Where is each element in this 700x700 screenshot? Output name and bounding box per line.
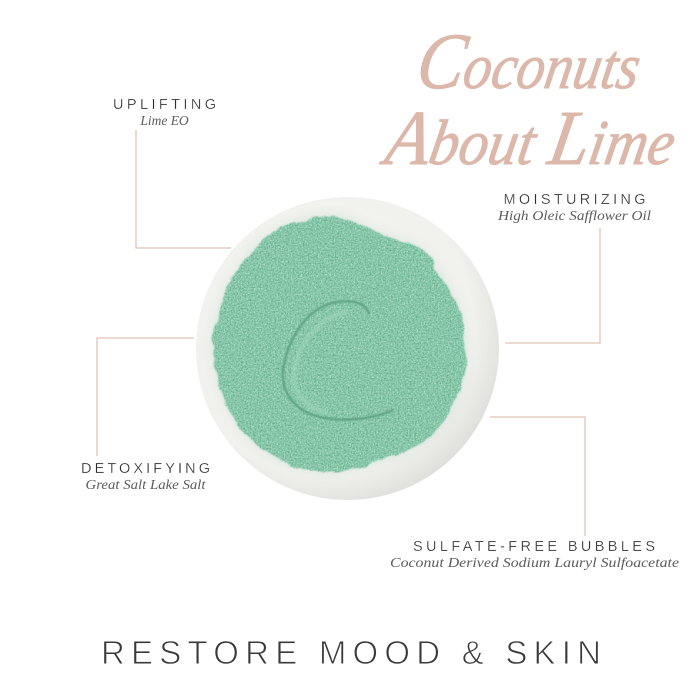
- callout: moisturizing: [497, 192, 651, 343]
- pressed letter C: [283, 301, 393, 420]
- title: About Lime: [375, 96, 683, 182]
- callout: detoxifying: Great Salt Lake Salt: [86, 477, 207, 492]
- callout: uplifting: [113, 97, 231, 248]
- callout: sulfate-free bubbles: Coconut Derived Sodium Lauryl Sulfoacetate: [390, 555, 679, 570]
- title: [375, 18, 683, 182]
- white bomb body: [196, 197, 499, 500]
- title: Coconuts: [411, 18, 648, 106]
- tagline: RESTORE MOOD & SKIN: [101, 634, 601, 671]
- callout: detoxifying: [81, 338, 210, 492]
- callout: moisturizing: MOISTURIZING: [504, 192, 646, 208]
- callout: uplifting: UPLIFTING: [113, 97, 216, 113]
- callout: sulfate-free bubbles: [390, 417, 679, 570]
- callout: sulfate-free bubbles: SULFATE-FREE BUBBLES: [413, 539, 655, 555]
- callout: detoxifying: DETOXIFYING: [81, 461, 210, 477]
- green top: [212, 215, 466, 473]
- callout: uplifting: Lime EO: [139, 113, 189, 128]
- callout: moisturizing: High Oleic Safflower Oil: [497, 208, 651, 223]
- bath bomb photo: [196, 197, 499, 500]
